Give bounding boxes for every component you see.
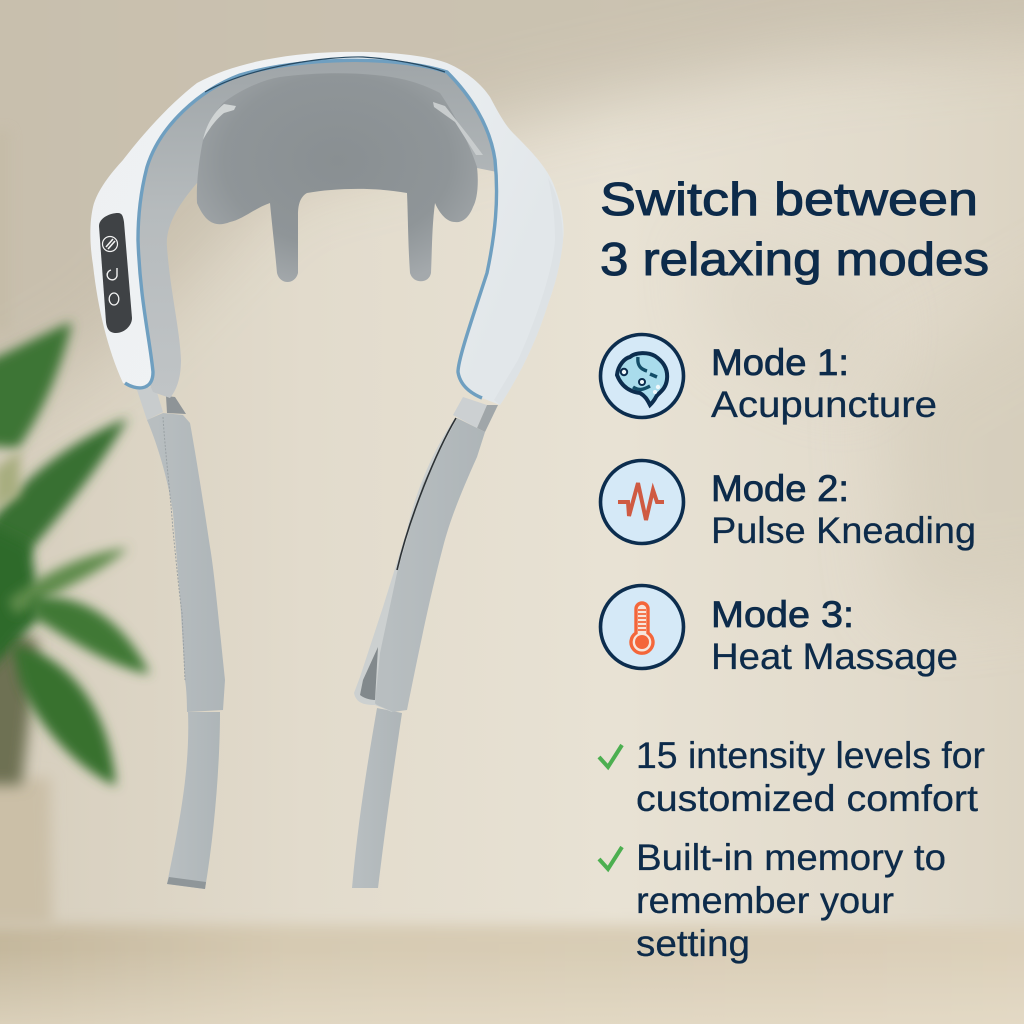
blurred potted plant — [0, 130, 150, 925]
neck pillow with two prongs — [197, 73, 478, 282]
label — [711, 342, 937, 425]
heading — [600, 173, 989, 285]
label: Mode 2: — [711, 468, 849, 509]
left strap — [137, 386, 225, 889]
blue trim line — [125, 60, 497, 398]
grey inner band — [138, 60, 497, 398]
label — [711, 594, 958, 677]
mode 3: heat massage — [600, 586, 958, 677]
label: Mode 3: — [711, 594, 854, 635]
feature: memory: Built-in memory to — [636, 837, 946, 878]
icon: pulse — [600, 460, 684, 544]
icon: check — [599, 847, 622, 869]
label: Mode 1: — [711, 342, 849, 383]
control icon: swirl — [107, 268, 117, 280]
feature: intensity levels: 15 intensity levels for — [636, 735, 985, 776]
dark top edge — [205, 57, 445, 92]
right shell side facet — [494, 178, 563, 405]
mode 2: pulse kneading — [600, 460, 976, 551]
icon: check — [599, 745, 622, 767]
icon: head — [600, 334, 684, 418]
feature: memory: remember your — [636, 880, 894, 921]
control icon: power — [109, 293, 119, 305]
product: neck massager — [90, 52, 564, 889]
pillow clips — [203, 104, 236, 140]
control icon: mode — [102, 236, 118, 252]
heading: 3 relaxing modes — [600, 233, 989, 285]
label: Acupuncture — [711, 384, 937, 425]
label: Heat Massage — [711, 636, 958, 677]
label: Pulse Kneading — [711, 510, 976, 551]
icon: thermometer — [600, 586, 684, 668]
heading: Switch between — [600, 173, 978, 225]
feature: intensity levels: customized comfort — [636, 778, 979, 819]
right strap — [352, 397, 498, 888]
white shell — [90, 52, 564, 405]
control panel — [99, 213, 132, 333]
feature: memory: setting — [636, 923, 750, 964]
mode 1: acupuncture — [600, 334, 937, 425]
feature: intensity levels — [599, 735, 985, 819]
feature: memory — [599, 837, 946, 964]
label — [711, 468, 976, 551]
